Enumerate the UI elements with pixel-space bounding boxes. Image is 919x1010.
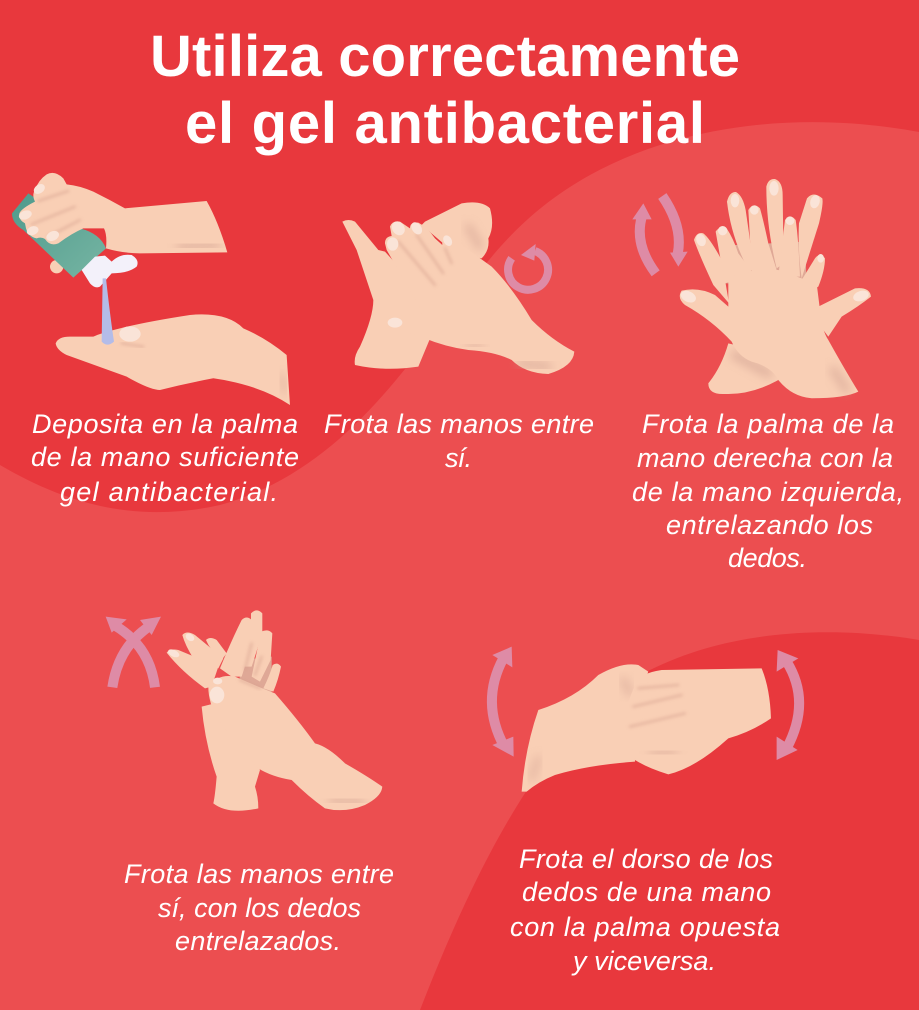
icon: crossed arrows: [106, 617, 161, 687]
icon: gel stream: [102, 278, 114, 345]
icon: fingertip under bottle: [50, 260, 63, 273]
step 4 text: [124, 859, 394, 956]
step 2 text: Frota las manos entre: [324, 409, 594, 439]
step 4: fingers interlaced: [106, 610, 382, 811]
icon: left hand: [522, 664, 648, 792]
icon: front hand: [679, 205, 858, 398]
icon: rotation arrow: [508, 244, 548, 290]
icon: right arrow: [662, 196, 688, 267]
step 3 text: de la mano izquierda,: [632, 477, 904, 507]
step 3: interlaced fingers: [632, 179, 871, 398]
title: el gel antibacterial: [185, 91, 705, 156]
icon: upper hand: [18, 173, 227, 253]
step 4 text: Frota las manos entre: [124, 859, 394, 889]
step 1 text: gel antibacterial.: [60, 477, 278, 507]
step 5 text: con la palma opuesta: [510, 912, 780, 942]
step 3 text: Frota la palma de la: [642, 409, 894, 439]
icon: lower hand: [56, 314, 290, 405]
step 2: rubbing hands: [342, 202, 574, 374]
icon: gel bottle: [12, 193, 106, 278]
icon: left arrow: [632, 203, 656, 273]
icon: bottle cap: [82, 255, 138, 287]
step 3 text: dedos.: [728, 543, 807, 573]
step 3 text: [632, 409, 904, 573]
step 5 text: Frota el dorso de los: [519, 844, 773, 874]
step 5 text: dedos de una mano: [522, 877, 771, 907]
step 1 text: de la mano suficiente: [31, 442, 299, 472]
step 1 text: Deposita en la palma: [32, 409, 298, 439]
icon: right arrow: [777, 650, 799, 760]
step 4 text: entrelazados.: [175, 926, 341, 956]
icon: rear hand: [694, 179, 871, 394]
icon: rear hand: [167, 610, 281, 811]
step 3 text: mano derecha con la: [637, 443, 893, 473]
step 2 text: [324, 409, 594, 473]
title: [150, 24, 740, 156]
step 5 text: [510, 844, 780, 976]
step 5: back of fingers: [492, 647, 799, 792]
icon: front hand: [208, 676, 382, 810]
step 4 text: sí, con los dedos: [158, 893, 361, 923]
icon: rear hand: [342, 202, 492, 369]
step 1: gel on palm: [12, 173, 290, 405]
icon: left arrow: [492, 647, 514, 757]
step 1 text: [31, 409, 299, 507]
step 3 text: entrelazando los: [666, 510, 873, 540]
icon: front hand: [385, 219, 574, 374]
step 5 text: y viceversa.: [571, 946, 716, 976]
step 2 text: sí.: [445, 443, 472, 473]
icon: right hand: [625, 668, 771, 774]
title: Utiliza correctamente: [150, 24, 740, 89]
